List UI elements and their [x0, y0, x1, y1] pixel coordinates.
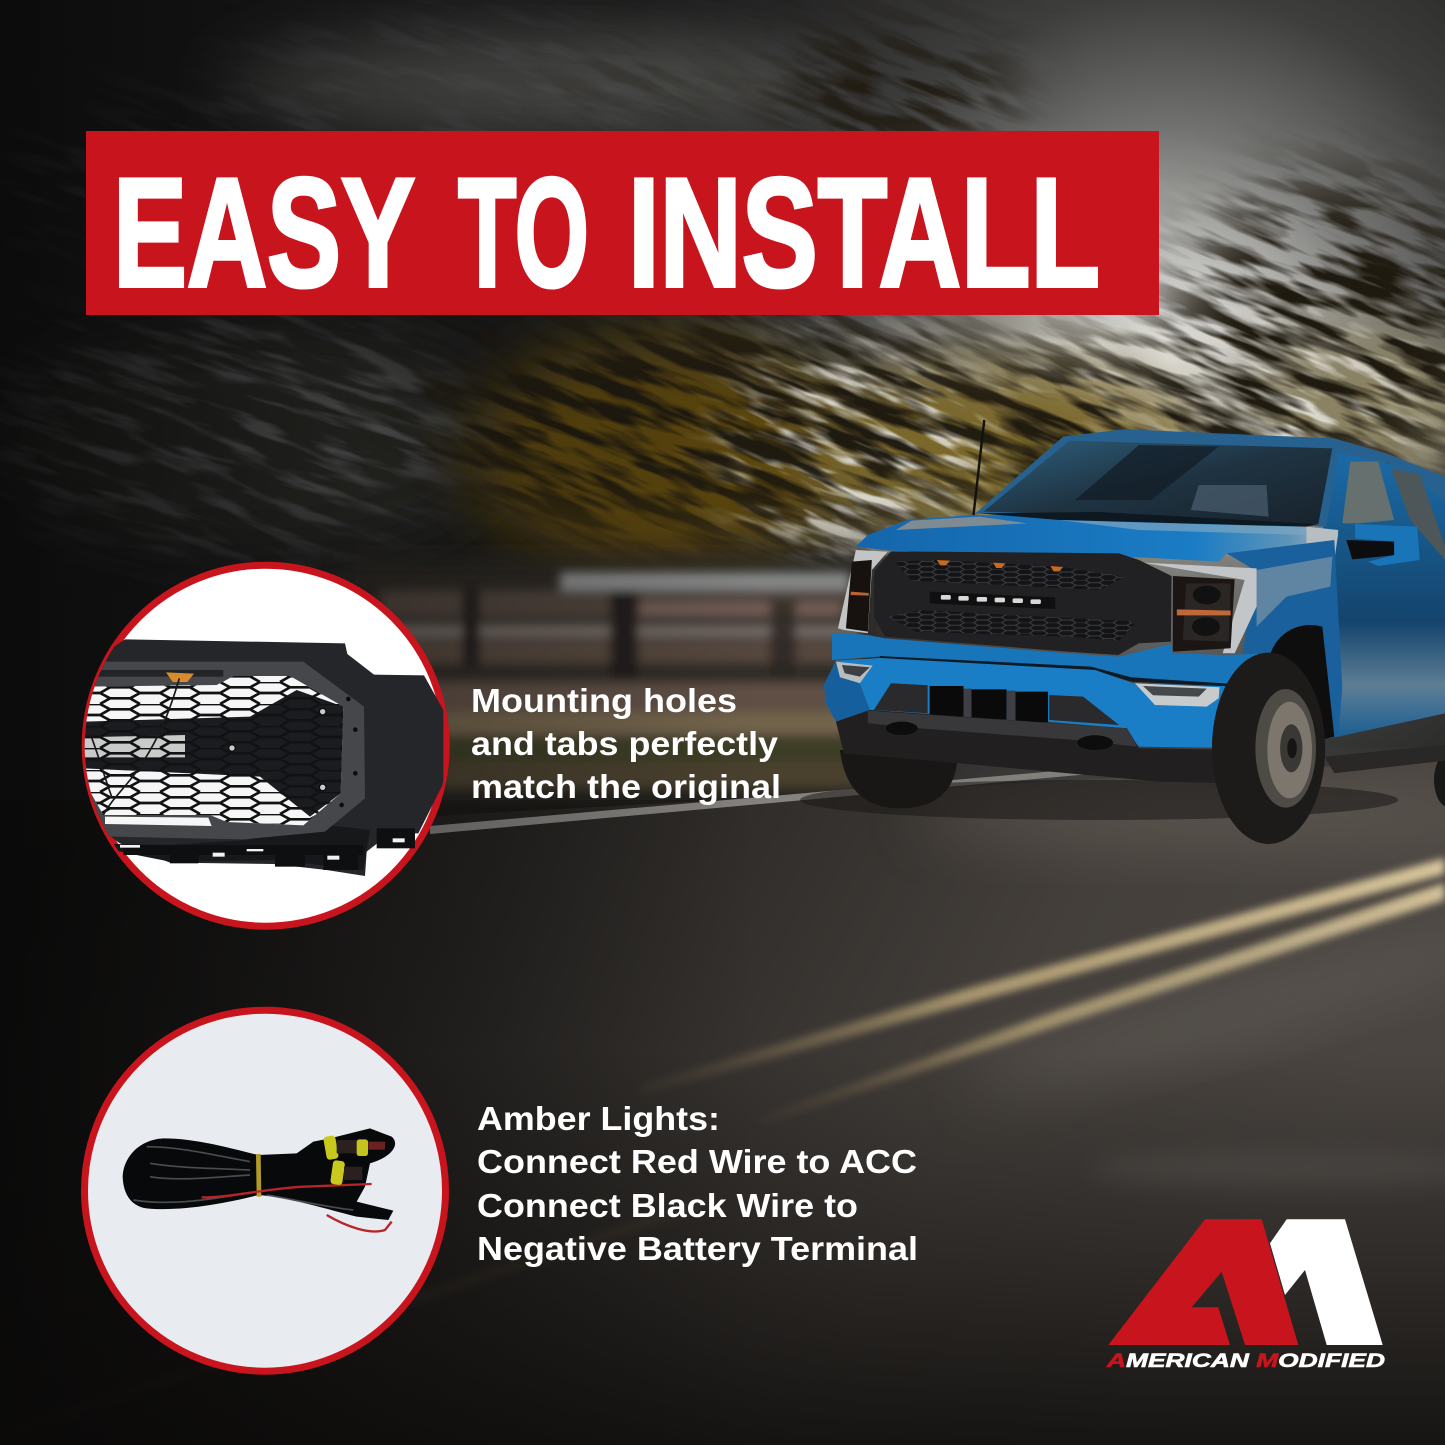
lower mesh [888, 610, 1137, 641]
mirror [1346, 524, 1420, 566]
roof [975, 429, 1445, 527]
red wire [202, 1184, 392, 1231]
led bar [83, 735, 185, 757]
white sliver [105, 817, 212, 826]
grille [874, 551, 1172, 655]
ground shadow [800, 780, 1398, 820]
led bar [930, 592, 1055, 609]
wheel arch [1269, 625, 1334, 750]
text: amber lights [477, 1100, 918, 1267]
running board [1324, 745, 1445, 773]
antenna [973, 420, 984, 515]
circle: grille detail [83, 565, 446, 926]
headlight right [1143, 563, 1257, 653]
grille frame [83, 662, 365, 839]
circle: wiring harness [84, 1010, 446, 1371]
harness loops [123, 1128, 395, 1220]
lower clips [123, 828, 415, 870]
text: amber lights: Connect Red Wire to ACC [477, 1143, 917, 1180]
text: amber lights: Amber Lights: [477, 1100, 720, 1137]
title text: EASY [113, 146, 415, 319]
text: amber lights: Negative Battery Terminal [477, 1230, 918, 1267]
logo: American Modified [1106, 1219, 1385, 1372]
text: mounting holes [471, 682, 781, 805]
text: mounting holes: match the original [471, 768, 781, 805]
cab side body [1314, 450, 1445, 737]
fog lights [1135, 683, 1219, 707]
amber lights [937, 560, 1063, 571]
upper bumper band [832, 633, 1275, 687]
wires [90, 678, 179, 815]
title banner [86, 131, 1159, 319]
zip tie [256, 1154, 261, 1197]
lower bumper [824, 658, 1265, 748]
side windows [1342, 462, 1394, 523]
title text: TO [458, 146, 589, 319]
logo mark red A [1108, 1219, 1298, 1345]
connectors [323, 1135, 385, 1185]
headlight left [838, 550, 888, 633]
text: amber lights: Connect Black Wire to [477, 1187, 858, 1224]
logo mark white 1 [1270, 1219, 1383, 1345]
lower lip [836, 710, 1249, 783]
rear wheel [1434, 753, 1445, 807]
field and fence band [340, 560, 880, 800]
grille bumper [83, 639, 443, 876]
intake [874, 683, 928, 713]
front right wheel [1212, 653, 1325, 844]
text: mounting holes: Mounting holes [471, 682, 737, 719]
front left wheel [840, 750, 958, 808]
truck photo illustration [800, 420, 1445, 844]
logo wordmark: A MERICAN M ODIFIED [1106, 1351, 1385, 1372]
amber lens [166, 672, 194, 682]
front fender [1227, 540, 1342, 750]
grille mesh [83, 676, 343, 825]
bolts [229, 708, 326, 791]
windshield [983, 441, 1332, 524]
text: mounting holes: and tabs perfectly [471, 725, 779, 762]
title text [113, 146, 1100, 319]
hood [856, 515, 1338, 562]
upper mesh [895, 560, 1125, 590]
title text: INSTALL [628, 146, 1100, 319]
